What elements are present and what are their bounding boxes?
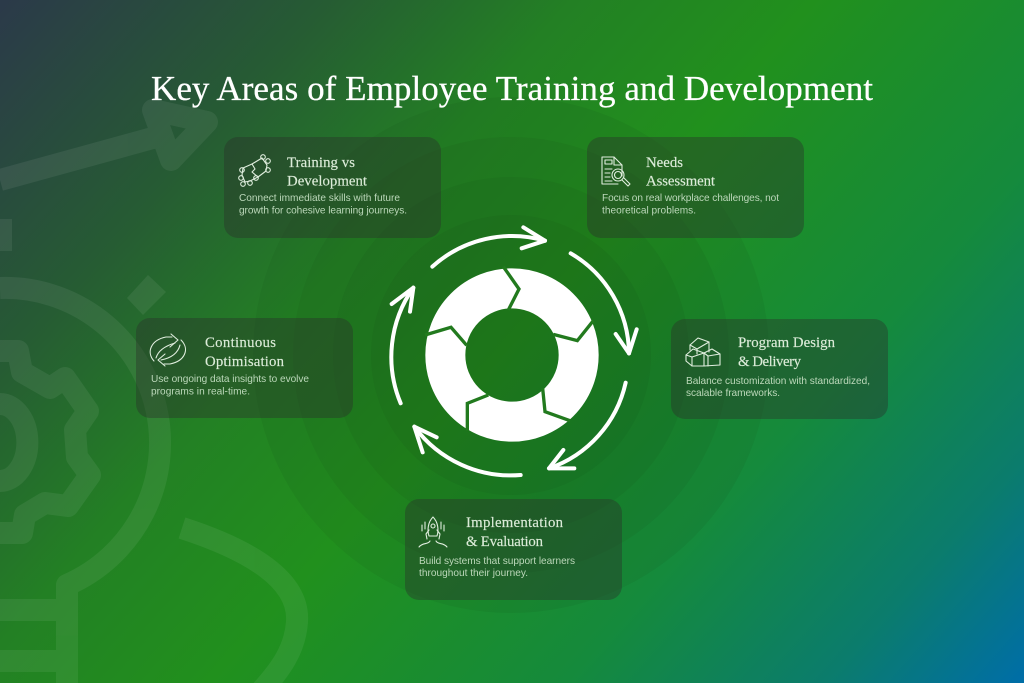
icon: puzzle pieces: [239, 155, 270, 186]
icon: circular arrows: [150, 334, 185, 366]
description: Use ongoing data insights to evolve: [151, 374, 309, 385]
panel: Training vs Development: growth for cohesive learning journeys.: [239, 206, 407, 216]
panel: Needs Assessment: [587, 137, 804, 238]
heading: Continuous: [205, 335, 276, 351]
arrow: left: [391, 288, 413, 403]
description: Connect immediate skills with future: [239, 193, 400, 204]
description: Build systems that support learners: [419, 556, 575, 567]
watermark: lightbulb with gear and arrow: [0, 110, 297, 683]
icon: document with magnifier: [602, 157, 630, 186]
panel: Training vs Development: [224, 137, 441, 238]
arrow: right: [571, 253, 637, 353]
icon: rocket launch: [419, 517, 447, 547]
panel: Needs Assessment: theoretical problems.: [602, 206, 696, 216]
heading: Needs: [646, 155, 683, 171]
title: Key Areas of Employee Training and Development: [151, 69, 873, 108]
panel: Continuous Optimisation: [136, 318, 353, 418]
icon: stacked boxes: [686, 338, 720, 366]
segmented ring: [425, 267, 593, 431]
panel: Program Design & Delivery: [671, 319, 888, 419]
heading: Training vs: [287, 155, 355, 171]
heading: Implementation: [466, 515, 564, 531]
panel: Implementation & Evaluation: [405, 499, 622, 600]
panel: Implementation & Evaluation: throughout their journey.: [419, 568, 528, 579]
description: Focus on real workplace challenges, not: [602, 193, 779, 204]
arrow: top: [432, 227, 545, 267]
panel: Training vs Development: Development: [287, 174, 368, 190]
panel: Continuous Optimisation: programs in real-time.: [151, 386, 250, 398]
panel: Needs Assessment: Assessment: [646, 174, 716, 190]
arrow: lower left: [414, 427, 521, 475]
central cycle diagram: [391, 227, 637, 475]
panel: Implementation & Evaluation: & Evaluation: [466, 534, 544, 550]
concentric glow circles: [253, 97, 769, 613]
description: Balance customization with standardized,: [686, 376, 870, 387]
heading: Program Design: [738, 335, 836, 351]
panel: Program Design & Delivery: & Delivery: [738, 354, 802, 370]
panel: Program Design & Delivery: scalable frameworks.: [686, 388, 780, 399]
arrow: lower right: [549, 383, 626, 468]
panel: Continuous Optimisation: Optimisation: [205, 354, 285, 370]
